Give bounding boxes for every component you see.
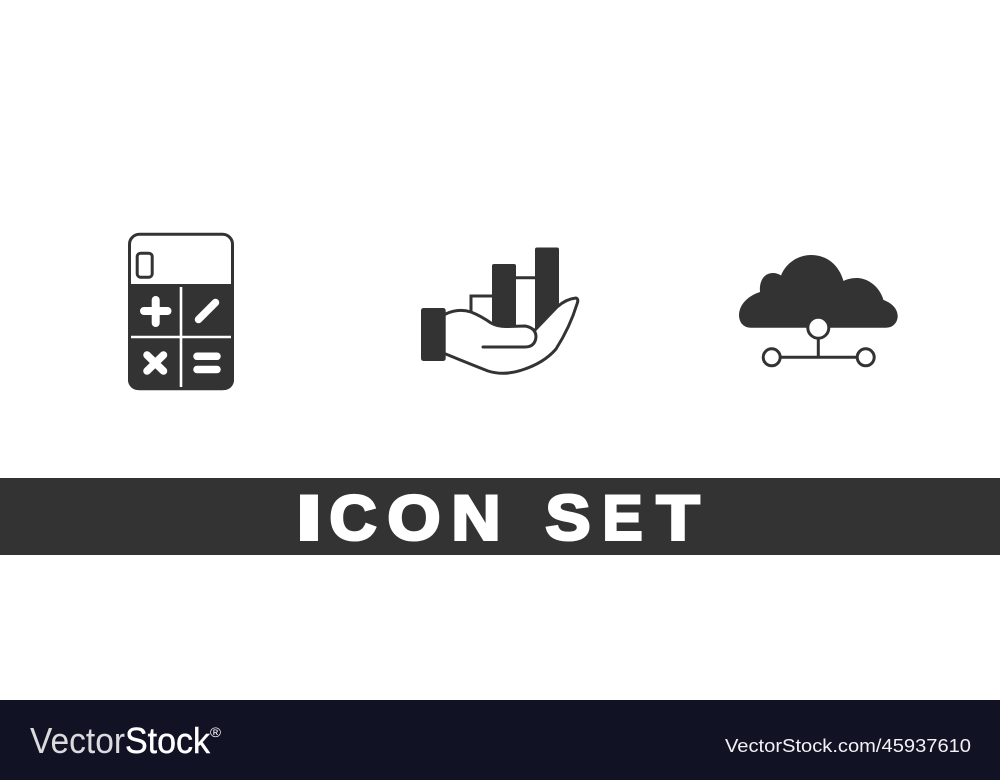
banner title: S [546, 484, 590, 554]
banner title: N [452, 484, 500, 554]
footer logo: VectorStock: ® [210, 724, 222, 740]
banner: icon set [0, 478, 1000, 555]
footer logo: VectorStock: Vector [30, 720, 125, 761]
banner title [296, 484, 700, 554]
banner title: I [296, 484, 322, 554]
footer image id: VectorStock.com/45937610 [725, 736, 971, 756]
footer bar [0, 700, 1000, 780]
banner title: C [330, 484, 376, 554]
banner title: T [656, 484, 700, 554]
banner title: E [602, 484, 642, 554]
footer logo: VectorStock [30, 720, 222, 761]
icon: hand holding bar chart [421, 248, 578, 373]
icon: calculator [128, 234, 234, 390]
footer logo: VectorStock: Stock [125, 720, 211, 761]
banner title: O [388, 484, 440, 554]
icon: cloud network [739, 255, 898, 366]
